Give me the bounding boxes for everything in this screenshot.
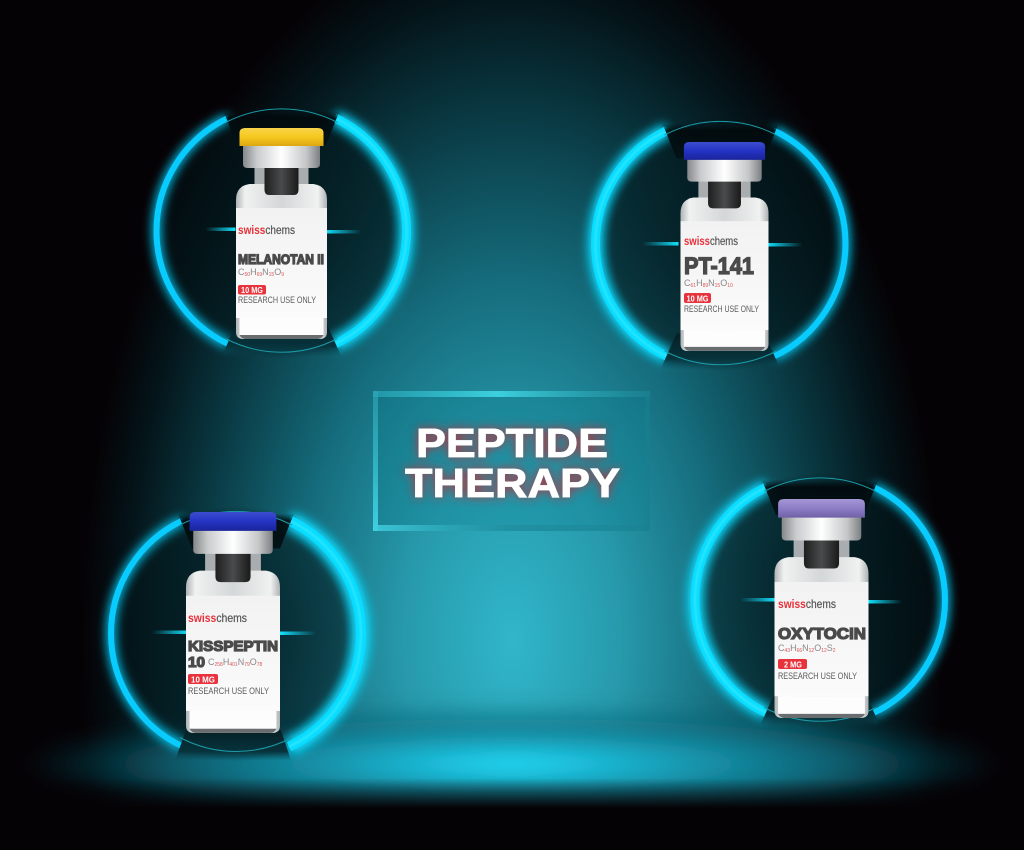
vial label: RESEARCH USE ONLY [684, 304, 759, 315]
vial label: OXYTOCIN [778, 626, 866, 643]
vial label: O [274, 267, 281, 277]
vial label: swisschems [188, 611, 247, 625]
vial label: O [250, 657, 257, 667]
glowing ring [692, 472, 948, 728]
panel: PT-141 [592, 116, 848, 372]
vial label: KISSPEPTIN [188, 638, 278, 655]
vial label: N [708, 278, 715, 288]
heading: peptide therapy: PEPTIDE [416, 420, 608, 466]
vial label: 10 MG [241, 285, 263, 295]
vial label: H [223, 657, 229, 667]
vial label: 15 [715, 283, 720, 289]
vial label: 401 [229, 662, 238, 668]
vial label: H [696, 278, 703, 288]
vial label: 10 MG [191, 674, 215, 684]
vial label: S [827, 643, 833, 653]
vial label: 69 [257, 272, 262, 278]
vial label [778, 597, 866, 682]
vial label: N [262, 267, 269, 277]
panel: kisspeptin 10 [108, 506, 364, 762]
vial label: 9 [281, 272, 284, 278]
vial label: H [790, 643, 797, 653]
vial label: 61 [690, 283, 696, 289]
vial label: MELANOTAN II [238, 251, 324, 267]
vial label: swisschems [778, 597, 836, 611]
vial label: 10 [727, 283, 733, 289]
vial label: N [238, 657, 244, 667]
heading: peptide therapy [405, 420, 620, 506]
vial label: 78 [257, 662, 263, 668]
vial label: 50 [244, 272, 250, 278]
vial label [188, 611, 278, 697]
vial label: swisschems [238, 223, 295, 237]
heading: peptide therapy: THERAPY [405, 460, 620, 506]
vial [186, 512, 280, 733]
vial [236, 128, 327, 339]
vial label: 66 [797, 648, 802, 654]
vial label: 79 [244, 662, 250, 668]
glowing ring [108, 506, 364, 762]
vial label: 12 [809, 648, 814, 654]
vial label: 2 MG [784, 660, 802, 670]
panel: oxytocin [692, 472, 948, 728]
vial label [238, 223, 324, 306]
vial label: 2 [833, 648, 836, 654]
vial label: 258 [214, 662, 223, 668]
vial label: swisschems [684, 234, 738, 248]
vial label: O [814, 643, 821, 653]
vial label: 10 [188, 654, 205, 671]
vial label: C [238, 267, 244, 277]
vial label: PT-141 [684, 253, 754, 280]
vial label: 43 [784, 648, 790, 654]
title frame [373, 391, 650, 531]
vial label: 10 MG [686, 294, 709, 304]
vial label: RESEARCH USE ONLY [188, 686, 270, 697]
glowing ring [154, 103, 410, 359]
vial label: H [250, 267, 257, 277]
vial label: N [802, 643, 809, 653]
floor lower fade [0, 778, 1024, 850]
vial label: C [684, 278, 690, 288]
floor glow [22, 708, 1002, 820]
vial label: RESEARCH USE ONLY [778, 671, 858, 682]
vial label: 89 [703, 283, 708, 289]
vial label: 12 [821, 648, 827, 654]
vial label: C [208, 657, 214, 667]
vial label: 15 [269, 272, 274, 278]
panel: melanotan II [154, 103, 410, 359]
central title panel [373, 391, 650, 531]
glowing ring [592, 116, 848, 372]
vial [774, 499, 869, 718]
vial label: O [720, 278, 727, 288]
vial label: C [778, 643, 784, 653]
vial [681, 142, 768, 351]
vial label [684, 234, 759, 315]
vial label: RESEARCH USE ONLY [238, 295, 317, 306]
